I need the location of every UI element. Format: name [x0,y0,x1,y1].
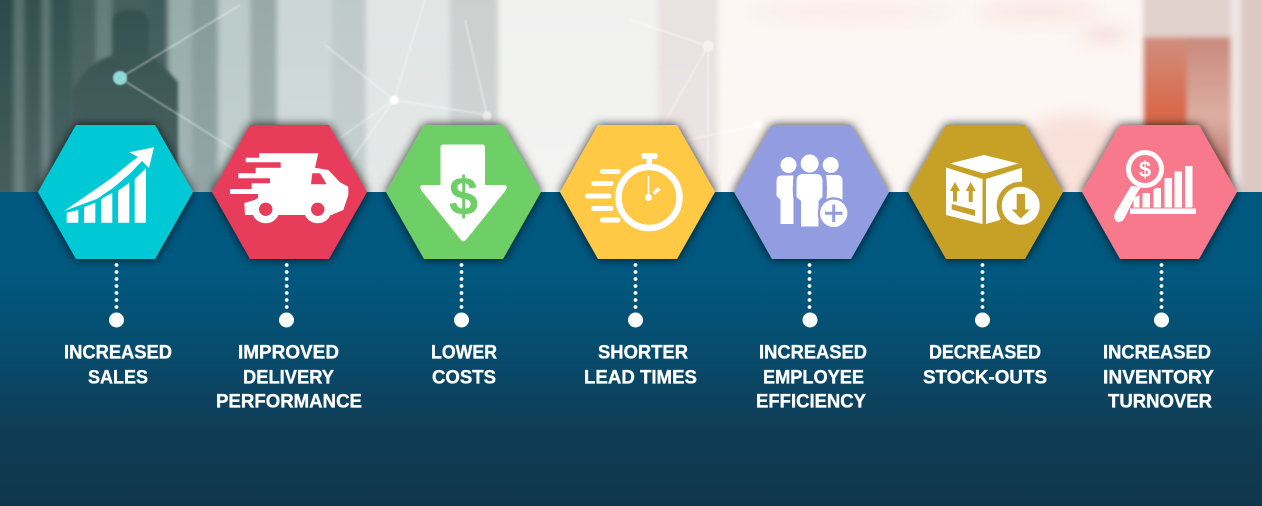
connector 5 [802,265,818,328]
connector 4 [628,265,643,328]
label: shorter lead times: LEAD TIMES [584,368,697,388]
icon: stopwatch [588,153,680,228]
icon: rising bar chart with arrow [64,147,154,223]
icon: team with plus [776,154,850,229]
hexagon 2: improved delivery [212,125,367,259]
label: lower costs: COSTS [432,368,496,388]
icon: down arrow with dollar: $ [449,166,478,226]
label: improved delivery performance: DELIVERY [243,368,334,388]
connector 1 [109,265,124,328]
hexagon 3: lower costs [386,125,541,259]
icon: magnifier over chart: $ [1139,157,1151,182]
label: increased inventory turnover: INCREASED [1103,342,1211,364]
label: increased employee efficiency: EMPLOYEE [763,368,864,388]
label: decreased stock-outs: STOCK-OUTS [923,368,1047,388]
connector 7 [1154,265,1169,328]
label: improved delivery performance [216,342,362,412]
photo background band [0,0,1262,205]
label: decreased stock-outs [923,342,1047,388]
hexagon 6: decreased stock-outs [908,125,1063,259]
connector 2 [279,265,294,328]
label: increased employee efficiency: EFFICIENCY [756,392,866,412]
icon: down arrow with dollar [420,144,507,242]
lower blue band [0,192,1262,506]
label: shorter lead times: SHORTER [598,342,688,364]
connector 6 [975,265,990,328]
label: lower costs [431,342,497,388]
label: improved delivery performance: PERFORMANCE [216,392,362,412]
hexagon 4: shorter lead times [560,125,715,259]
connector 3 [454,265,469,328]
label: increased inventory turnover: INVENTORY [1103,368,1214,388]
hexagon 1: increased sales [38,125,193,259]
icon: magnifier over chart [1114,147,1196,222]
label: increased sales [64,342,172,388]
label: increased employee efficiency [756,342,867,412]
icon: box with down arrow [946,155,1045,230]
label: decreased stock-outs: DECREASED [929,342,1041,364]
network nodes [113,40,762,130]
label: increased inventory turnover [1103,342,1214,412]
label: increased inventory turnover: TURNOVER [1108,392,1212,412]
hexagon 7: inventory turnover [1082,125,1237,259]
label: increased sales: SALES [88,368,148,388]
label: increased employee efficiency: INCREASED [759,342,867,364]
label: shorter lead times [584,342,697,388]
label: improved delivery performance: IMPROVED [238,342,339,364]
label: increased sales: INCREASED [64,342,172,364]
hexagon 5: employee efficiency [734,125,889,259]
label: lower costs: LOWER [431,342,497,364]
icon: speeding truck [230,153,348,223]
silhouette figure [73,10,180,168]
